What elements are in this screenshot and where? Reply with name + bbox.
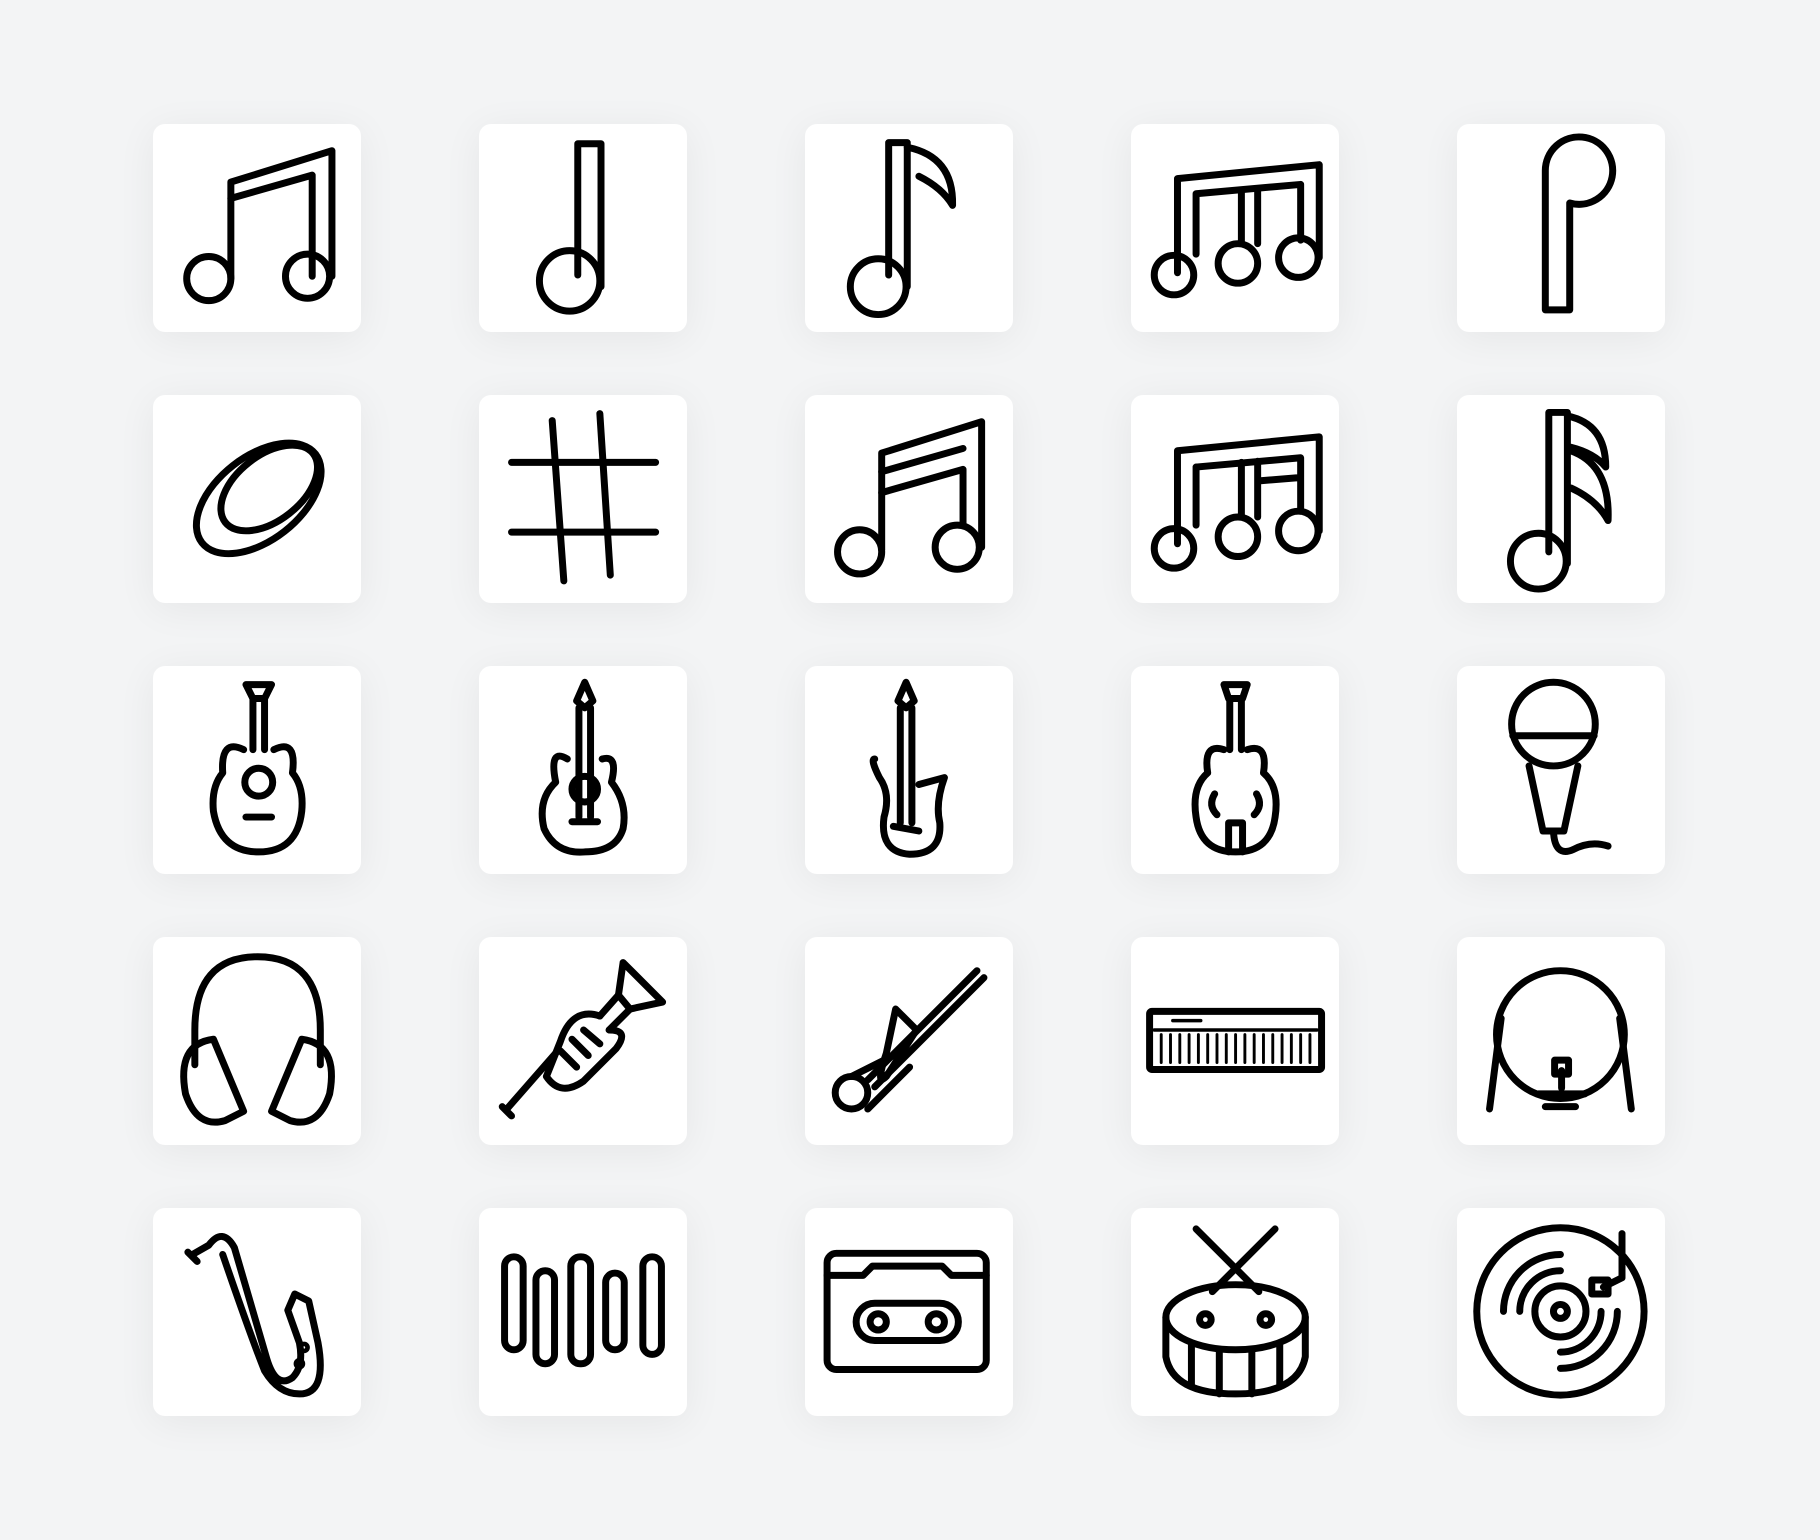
tile: beamed eighth notes xyxy=(153,124,361,332)
tile: whole note xyxy=(153,395,361,603)
tile: electric guitar xyxy=(479,666,687,874)
tile: sixteenth triplet xyxy=(1131,395,1339,603)
tile: sixteenth note xyxy=(1457,395,1665,603)
tile: drum xyxy=(1131,1208,1339,1416)
tile: beamed sixteenth notes xyxy=(805,395,1013,603)
tile: violin xyxy=(1131,666,1339,874)
tile: keyboard xyxy=(1131,937,1339,1145)
tile: drum kit xyxy=(1457,937,1665,1145)
tile: trumpet xyxy=(479,937,687,1145)
tile: vinyl record xyxy=(1457,1208,1665,1416)
tile: eighth note xyxy=(805,124,1013,332)
tile: half note xyxy=(479,124,687,332)
tile: trombone xyxy=(805,937,1013,1145)
tile: headphones xyxy=(153,937,361,1145)
tile: triplet notes xyxy=(1131,124,1339,332)
tile: microphone xyxy=(1457,666,1665,874)
tile: cassette xyxy=(805,1208,1013,1416)
tile: saxophone xyxy=(153,1208,361,1416)
tile: acoustic guitar xyxy=(153,666,361,874)
tile: p note xyxy=(1457,124,1665,332)
tile: sharp xyxy=(479,395,687,603)
tile: sound bars xyxy=(479,1208,687,1416)
tile: bass guitar xyxy=(805,666,1013,874)
